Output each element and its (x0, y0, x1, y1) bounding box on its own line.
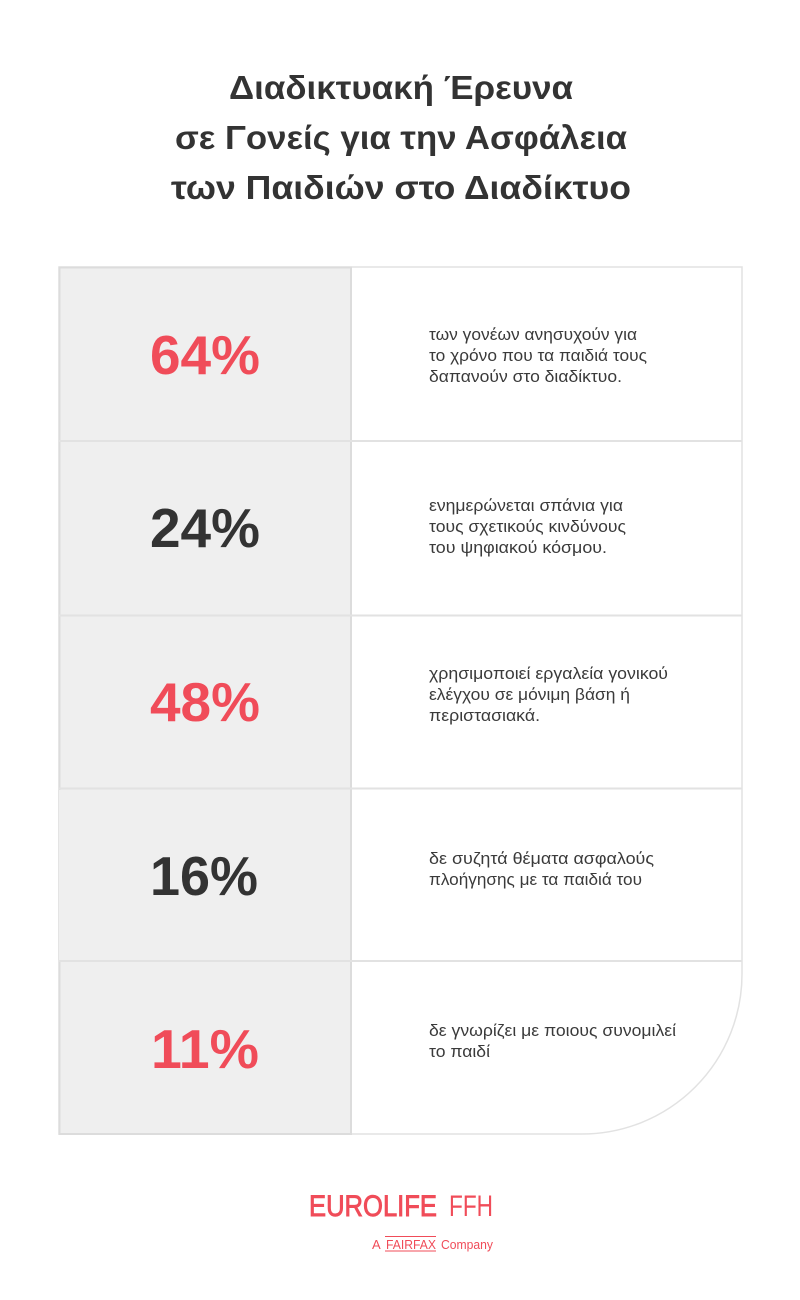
row 1: 64%: των γονέων ανησυχούν για (429, 325, 637, 344)
row 4: 16%: δε συζητά θέματα ασφαλούς (429, 849, 654, 868)
logo: Eurolife FFH (309, 1190, 493, 1252)
logo: Eurolife FFH: FFH (449, 1190, 493, 1223)
logo: Eurolife FFH: Company (441, 1237, 493, 1252)
row 2: 24%: 24% (150, 497, 260, 559)
row 2: 24%: του ψηφιακού κόσμου. (429, 538, 607, 557)
row 3: 48%: χρησιμοποιεί εργαλεία γονικού (429, 664, 668, 683)
title (171, 69, 631, 206)
row 2: 24%: ενημερώνεται σπάνια για (429, 496, 623, 515)
row 4: 16%: 16% (150, 845, 258, 907)
row 5: 11%: 11% (151, 1018, 259, 1080)
row 3: 48% (150, 664, 668, 733)
table frame (58, 267, 742, 1134)
title: σε Γονείς για την Ασφάλεια (175, 119, 627, 156)
row 3: 48%: ελέγχου σε μόνιμη βάση ή (429, 685, 630, 704)
row 5: 11%: το παιδί (429, 1042, 490, 1061)
row 1: 64%: 64% (150, 324, 260, 386)
logo: Eurolife FFH: FAIRFAX (386, 1237, 436, 1252)
row 1: 64% (150, 324, 647, 386)
row 4: 16%: πλοήγησης με τα παιδιά του (429, 870, 642, 889)
logo: Eurolife FFH: A (372, 1237, 381, 1252)
title: των Παιδιών στο Διαδίκτυο (171, 169, 631, 206)
row 2: 24% (150, 496, 626, 559)
row 2: 24%: τους σχετικούς κινδύνους (429, 517, 626, 536)
logo: Eurolife FFH: EUROLIFE (309, 1190, 437, 1223)
row 1: 64%: δαπανούν στο διαδίκτυο. (429, 367, 622, 386)
row 3: 48%: 48% (150, 671, 260, 733)
row 1: 64%: το χρόνο που τα παιδιά τους (429, 346, 647, 365)
row 5: 11%: δε γνωρίζει με ποιους συνομιλεί (429, 1021, 676, 1040)
title: Διαδικτυακή Έρευνα (229, 69, 573, 106)
row 5: 11% (151, 1018, 676, 1080)
row 3: 48%: περιστασιακά. (429, 706, 540, 725)
row 4: 16% (150, 845, 654, 907)
